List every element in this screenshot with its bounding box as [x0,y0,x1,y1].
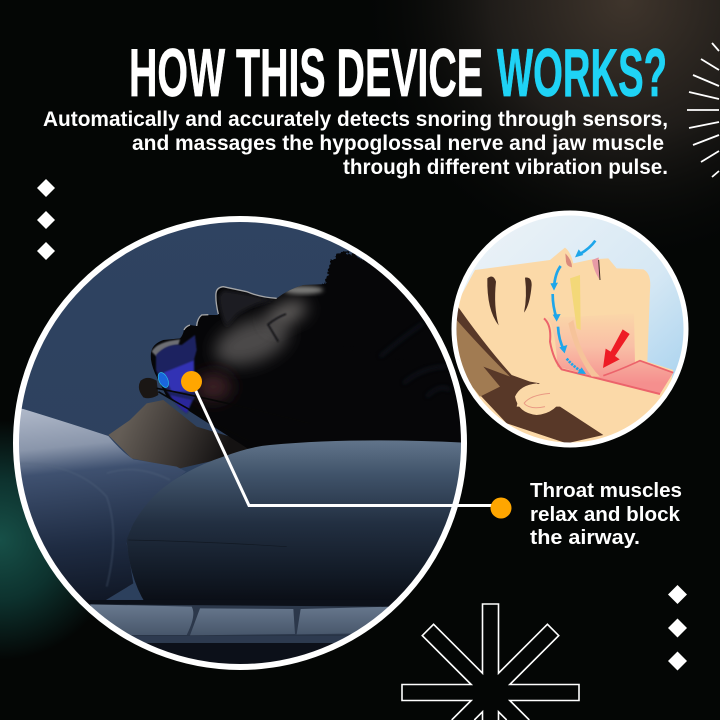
throat edge [544,318,660,394]
shirt fold lines [103,493,114,587]
sky backdrop [22,222,369,600]
temple light [263,295,311,332]
icon: left diamonds [37,179,55,260]
icon: outlined asterisk [402,604,579,720]
face rim light [184,287,277,330]
marker dot on device [181,371,202,392]
lower lip and chin sheen [152,339,180,357]
device [156,335,197,413]
hair [322,251,461,442]
description text: and massages the hypoglossal nerve and jaw muscle [132,132,664,155]
pillow [127,440,477,610]
nostril and mouth [565,253,572,267]
head silhouette [150,284,332,448]
description text [43,108,668,179]
throat [550,322,674,394]
device pulse [158,372,169,388]
eyes [487,276,499,325]
neck [108,400,263,468]
marker dot on callout [490,498,512,518]
callout line [192,382,501,506]
callout text: the airway. [530,527,640,549]
hair [453,300,603,443]
description text: through different vibration pulse. [343,156,668,179]
device straps [156,388,228,410]
lower face warm tone [195,373,232,400]
callout text [530,480,682,549]
icon: right diamonds [668,585,687,670]
nose interior [218,290,269,324]
microphone [139,378,158,398]
decoration: sunburst top right [687,43,719,177]
mattress [85,600,388,664]
forehead light [283,286,323,294]
eye crease [267,314,286,342]
airflow arrows [553,241,595,373]
photo ring [16,219,464,667]
tongue [570,275,581,330]
ear [515,383,556,415]
illustration: airway diagram [440,210,700,450]
face and neck [453,248,673,443]
illustration ring [454,213,686,445]
red arrow [603,329,630,368]
callout text: relax and block [530,504,681,526]
pillow crease [128,540,287,547]
shirt [19,408,186,600]
sky [462,216,684,380]
callout text: Throat muscles [530,480,682,502]
cheek light [209,309,295,374]
description text: Automatically and accurately detects snoring through sensors, [43,108,668,131]
photo: man sleeping with device [10,210,477,673]
